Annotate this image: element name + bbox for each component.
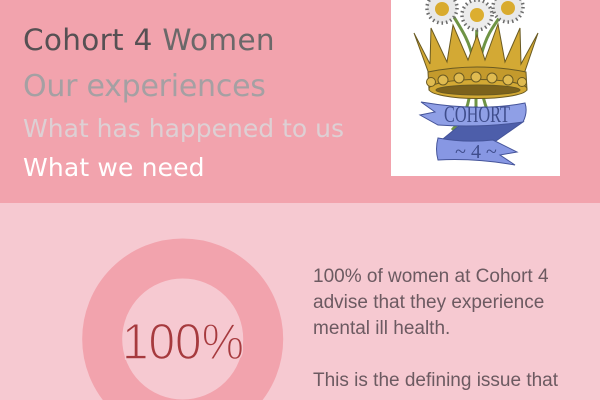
text block: mental health statement: 100% of women at Cohort 4	[313, 266, 549, 287]
daisies	[427, 0, 523, 30]
donut ring	[102, 258, 263, 400]
ribbon: ~ 4 ~	[455, 141, 497, 163]
panel: header banner	[0, 0, 600, 203]
text block: mental health statement: advise that they experience	[313, 292, 544, 313]
text block: mental health statement	[313, 266, 558, 391]
ribbon: COHORT	[444, 102, 510, 127]
heading: Our experiences: Our experiences	[23, 69, 266, 104]
crown	[414, 24, 538, 98]
text block: mental health statement: mental ill health.	[313, 318, 450, 339]
ribbon	[420, 102, 526, 165]
title: Cohort 4 Women: Cohort 4 Women	[23, 23, 275, 57]
chart: 100% donut	[82, 238, 284, 400]
stems	[452, 14, 502, 130]
icon: Cohort 4 crown and daisies logo	[391, 0, 560, 176]
donut value: 100%	[122, 313, 244, 370]
text block: mental health statement: This is the defining issue that	[313, 370, 558, 391]
heading: What we need: What we need	[23, 153, 205, 182]
heading: What has happened to us: What has happened to us	[23, 114, 344, 143]
